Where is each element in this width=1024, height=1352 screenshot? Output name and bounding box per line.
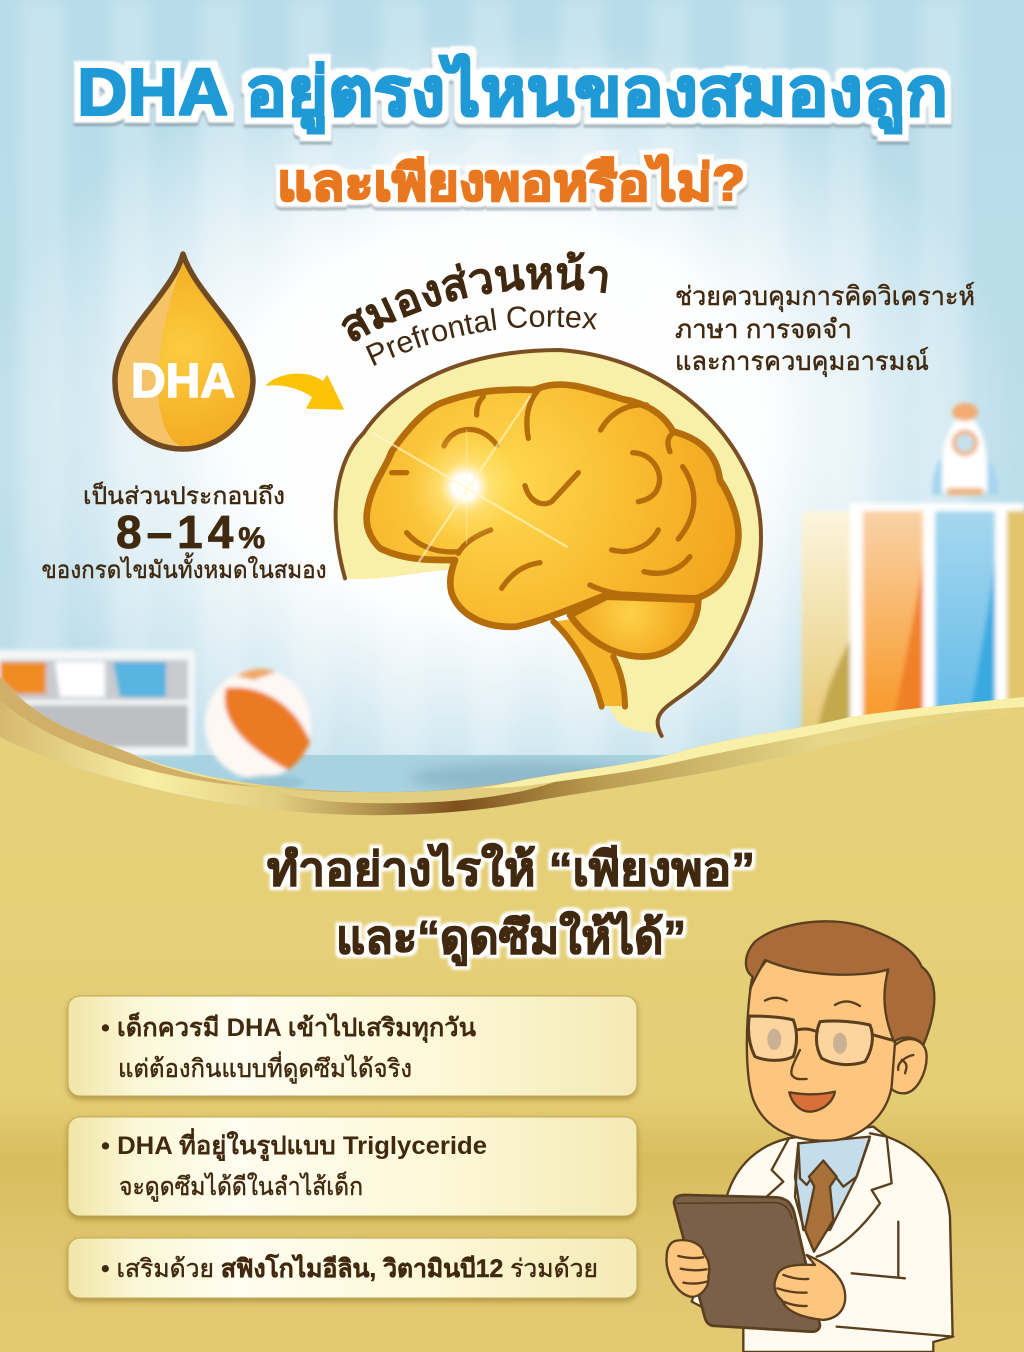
left hand bbox=[667, 1240, 709, 1297]
icon: DHA oil drop bbox=[115, 254, 253, 449]
brainstem bbox=[553, 617, 625, 707]
icon: DHA oil drop: DHA bbox=[131, 355, 235, 408]
card: triglyceride form: • DHA ที่อยู่ในรูปแบบ Triglyceride bbox=[101, 1128, 487, 1162]
eyebrows, nose bbox=[765, 998, 860, 1079]
cerebrum bbox=[367, 384, 738, 627]
hair bbox=[746, 921, 934, 1045]
right hand bbox=[775, 1255, 845, 1320]
ear bbox=[890, 1039, 927, 1093]
heading: prefrontal cortex, English: Prefrontal Cortex bbox=[366, 306, 598, 366]
sparkle on the prefrontal area bbox=[373, 397, 567, 570]
text: prefrontal function: และการควบคุมอารมณ์ bbox=[675, 346, 929, 377]
text: DHA share of brain fat: 8–14% bbox=[116, 506, 270, 558]
eyes bbox=[767, 1029, 847, 1054]
section heading: และ“ดูดซึมให้ได้” bbox=[336, 910, 686, 966]
glasses bbox=[748, 1016, 892, 1065]
shirt bbox=[795, 1137, 870, 1230]
section heading bbox=[267, 842, 755, 966]
main title: DHA อยู่ตรงไหนของสมองลูก bbox=[77, 53, 948, 134]
card: daily DHA bbox=[68, 996, 637, 1096]
card: sphingomyelin and B12 bbox=[68, 1238, 637, 1298]
text: DHA share of brain fat: เป็นส่วนประกอบถึง bbox=[83, 481, 285, 510]
cerebellum bbox=[570, 597, 698, 657]
lab coat bbox=[692, 1127, 953, 1352]
illustration: doctor with tablet bbox=[667, 921, 953, 1352]
subtitle: และเพียงพอหรือไม่? bbox=[277, 154, 745, 211]
text: prefrontal function bbox=[675, 281, 975, 377]
lapels bbox=[767, 1133, 892, 1257]
lockers bbox=[802, 503, 1024, 753]
brain folds bbox=[392, 390, 694, 597]
arrow: DHA to brain bbox=[267, 374, 343, 409]
card: sphingomyelin and B12: • เสริมด้วย สฟิงโกไมอีลิน, วิตามินบี12 ร่วมด้วย bbox=[101, 1253, 598, 1283]
collar bbox=[798, 1140, 869, 1187]
card: triglyceride form bbox=[68, 1117, 637, 1216]
card: daily DHA: แต่ต้องกินแบบที่ดูดซึมได้จริง bbox=[118, 1051, 412, 1084]
text: prefrontal function: ภาษา การจดจำ bbox=[675, 314, 852, 344]
tie bbox=[805, 1161, 837, 1252]
face bbox=[747, 960, 895, 1141]
illustration: head and brain bbox=[336, 350, 761, 736]
mouth bbox=[789, 1092, 835, 1112]
text: prefrontal function: ช่วยควบคุมการคิดวิเคราะห์ bbox=[675, 281, 975, 312]
beach ball bbox=[205, 669, 311, 789]
shelf with shirts bbox=[0, 650, 195, 755]
heading: prefrontal lobe, Thai: สมองส่วนหน้า bbox=[341, 251, 608, 342]
toy rocket bbox=[932, 403, 998, 495]
section heading: ทำอย่างไรให้ “เพียงพอ” bbox=[267, 842, 755, 895]
tablet bbox=[674, 1195, 820, 1332]
text: DHA share of brain fat bbox=[42, 481, 326, 584]
background: blurred nursery room bbox=[0, 0, 1024, 815]
card: daily DHA: • เด็กควรมี DHA เข้าไปเสริมทุกวัน bbox=[101, 1012, 476, 1044]
text: DHA share of brain fat: ของกรดไขมันทั้งหมดในสมอง bbox=[42, 552, 326, 584]
gold lower panel with ribbon wave bbox=[0, 677, 1024, 1352]
card: triglyceride form: จะดูดซึมได้ดีในลำไส้เด็ก bbox=[119, 1171, 363, 1202]
